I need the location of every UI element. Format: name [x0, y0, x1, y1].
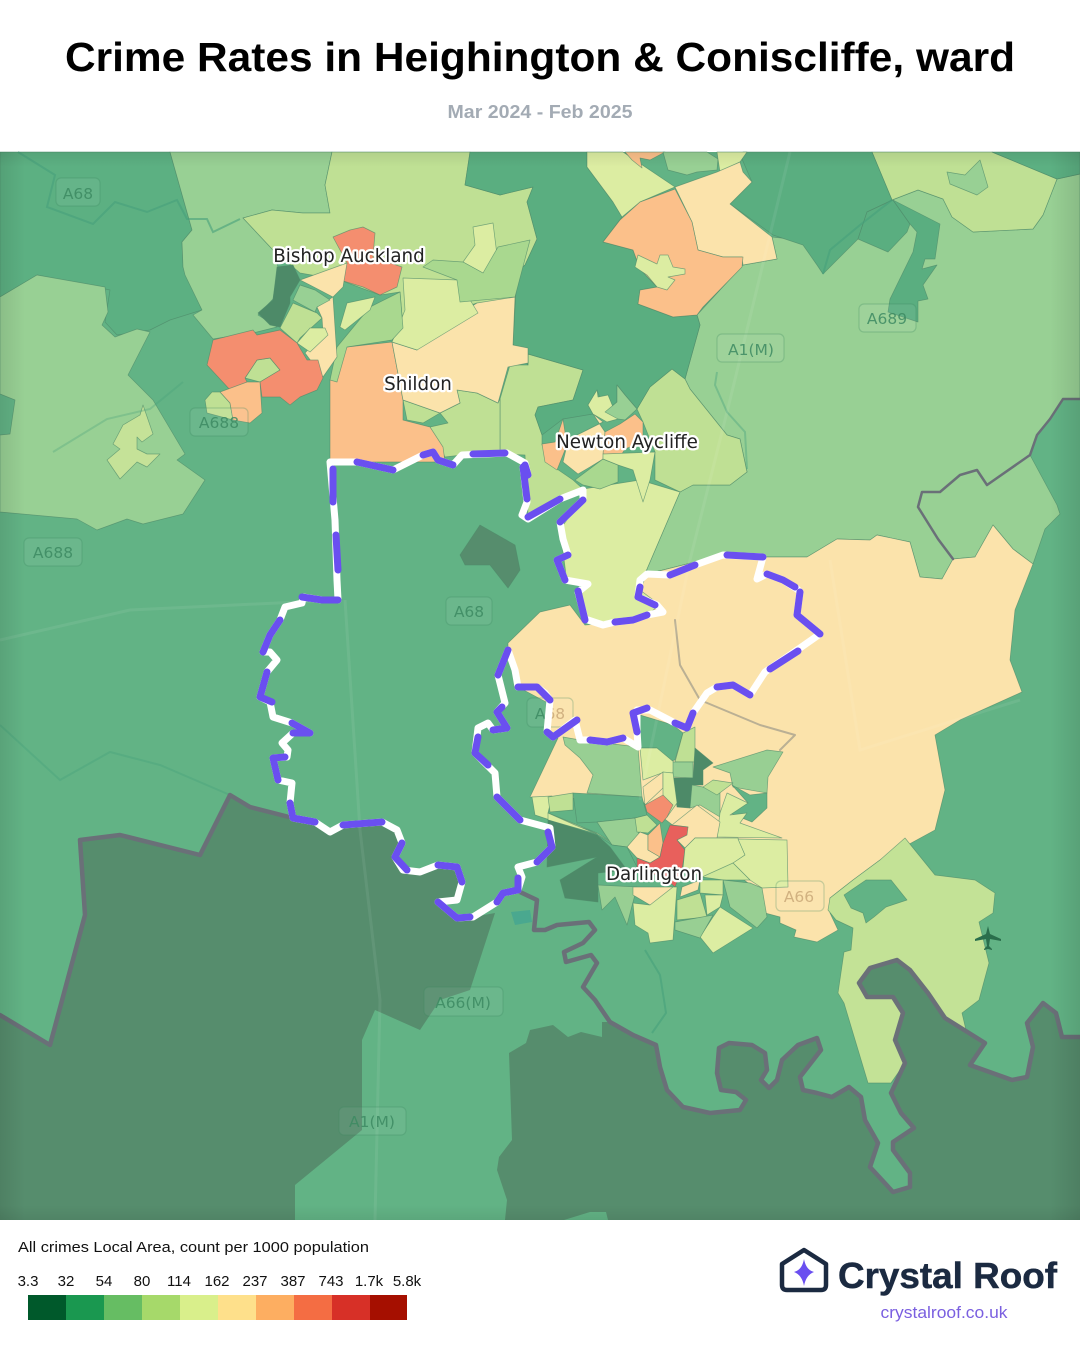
road label: A689: A689 — [867, 310, 907, 328]
place label: Darlington: Darlington — [606, 864, 702, 885]
brand url: crystalroof.co.uk — [880, 1303, 1008, 1322]
dark woodland ward inside Heighington — [460, 525, 520, 588]
legend scale values: 114 — [167, 1273, 191, 1290]
south-west dark wards — [0, 795, 495, 1220]
ward inside pale north-east — [947, 160, 988, 195]
central north darker green wards — [465, 152, 700, 435]
legend scale values: 743 — [318, 1273, 344, 1290]
road label: A688 west — [24, 538, 82, 566]
road label: A1(M) north — [717, 334, 784, 362]
road label: A688 near Bishop Auckland — [190, 408, 248, 436]
brand name: Crystal Roof — [838, 1255, 1058, 1296]
road label: A66(M) — [424, 987, 503, 1016]
map edge vignette — [0, 152, 1080, 1220]
icon: house with star — [782, 1250, 826, 1290]
road label: A68 central: A68 — [454, 603, 484, 621]
north-west darker green wards — [0, 152, 202, 335]
large Darlington cream ward — [508, 525, 1033, 942]
legend scale values: 1.7k — [355, 1273, 384, 1290]
Shildon wards — [330, 223, 530, 462]
place label: Bishop Auckland: Bishop Auckland — [273, 246, 425, 267]
place label: Newton Aycliffe: Newton Aycliffe — [556, 432, 698, 453]
road label: A688 near Bishop Auckland: A688 — [199, 414, 239, 432]
legend scale values: 162 — [204, 1273, 230, 1290]
road label: A66 — [776, 881, 824, 911]
airport-side pale ward — [828, 838, 995, 1083]
legend scale values: 387 — [280, 1273, 306, 1290]
road label: A68 north: A68 — [63, 185, 93, 203]
legend scale values: 54 — [96, 1273, 112, 1290]
choropleth map — [0, 152, 1080, 1220]
Newton Aycliffe wards — [542, 385, 680, 622]
legend scale values — [18, 1273, 422, 1290]
road label: A68 south: A68 — [535, 705, 565, 723]
legend title: All crimes Local Area, count per 1000 population — [18, 1239, 369, 1256]
large light green ward east — [647, 174, 1080, 579]
icon: airport plane — [975, 926, 1001, 950]
road label: A1(M) south — [339, 1107, 406, 1135]
pale green wards — [205, 152, 1057, 514]
legend — [18, 1239, 422, 1320]
road label: A68 central — [446, 597, 492, 625]
river Tees and county boundary — [0, 399, 1080, 1192]
road label: A1(M) north: A1(M) — [728, 341, 774, 359]
road label: A689 — [859, 304, 916, 332]
brand logo — [782, 1250, 1058, 1322]
road label: A688 west: A688 — [33, 544, 73, 562]
title: Crime Rates in Heighington & Coniscliffe, ward — [65, 34, 1015, 80]
north-east corner ward — [992, 152, 1080, 179]
ward boundary: Heighington & Coniscliffe — [260, 452, 820, 918]
pale ward west — [107, 405, 160, 479]
legend scale values: 237 — [242, 1273, 268, 1290]
Bishop Auckland wards — [207, 227, 402, 423]
south-east dark wards — [497, 960, 1080, 1220]
road label: A68 north — [56, 178, 100, 206]
date range subtitle: Mar 2024 - Feb 2025 — [448, 102, 632, 122]
faint roads — [0, 152, 1020, 1220]
place label: Shildon: Shildon — [384, 374, 452, 395]
road label: A1(M) south: A1(M) — [349, 1113, 395, 1131]
light green wards west — [0, 152, 332, 530]
teal lakes and streams — [0, 152, 892, 1033]
road label: A68 south — [527, 698, 573, 727]
road label: A66(M): A66(M) — [435, 994, 491, 1012]
legend scale values: 3.3 — [18, 1273, 38, 1290]
legend scale values: 80 — [134, 1273, 150, 1290]
legend colour swatches — [28, 1295, 407, 1320]
north-east wards: yellow-green, peach, cream — [587, 152, 777, 317]
green ward north of airport — [844, 880, 907, 923]
legend scale values: 5.8k — [393, 1273, 422, 1290]
Darlington urban wards — [532, 715, 788, 953]
north-east darker green wards — [730, 152, 940, 322]
legend scale values: 32 — [58, 1273, 74, 1290]
road label: A66: A66 — [784, 888, 814, 906]
